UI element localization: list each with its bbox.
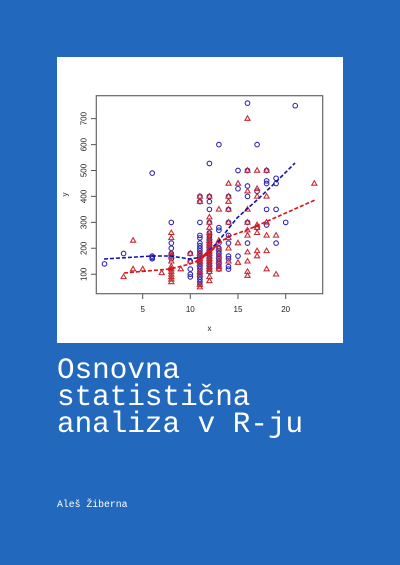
y axis ticks and labels: 700 <box>80 111 88 125</box>
y axis ticks and labels: 400 <box>80 189 88 203</box>
y axis ticks and labels: 300 <box>80 215 88 229</box>
y axis ticks and labels: 600 <box>80 137 88 151</box>
circle markers: blue series <box>102 101 298 287</box>
y axis ticks and labels: 500 <box>80 163 88 177</box>
x axis ticks and labels: 10 <box>186 305 195 314</box>
blue dashed trend line <box>104 163 295 259</box>
red dashed trend line <box>124 200 315 273</box>
x axis title: x <box>208 324 212 333</box>
x axis ticks and labels: 5 <box>140 305 145 314</box>
title <box>57 354 303 441</box>
author: Aleš Žiberna <box>57 499 128 510</box>
y axis ticks and labels: 100 <box>80 267 88 281</box>
x axis ticks and labels: 20 <box>281 305 291 314</box>
chart: scatter plot of y against x <box>60 96 323 333</box>
x axis ticks and labels <box>140 294 291 314</box>
y axis ticks and labels: 200 <box>80 241 88 255</box>
y axis title: y <box>60 192 70 196</box>
plot frame <box>96 96 323 294</box>
title: Osnovna <box>57 354 180 386</box>
title: analiza v R-ju <box>57 408 303 441</box>
title: statistična <box>57 381 250 414</box>
x axis ticks and labels: 15 <box>234 305 243 314</box>
triangle markers: red series <box>121 116 317 289</box>
y axis ticks and labels <box>80 111 96 281</box>
panel: scatter plot card <box>57 57 343 343</box>
red trend line emphasis at the dense centre <box>168 248 214 269</box>
